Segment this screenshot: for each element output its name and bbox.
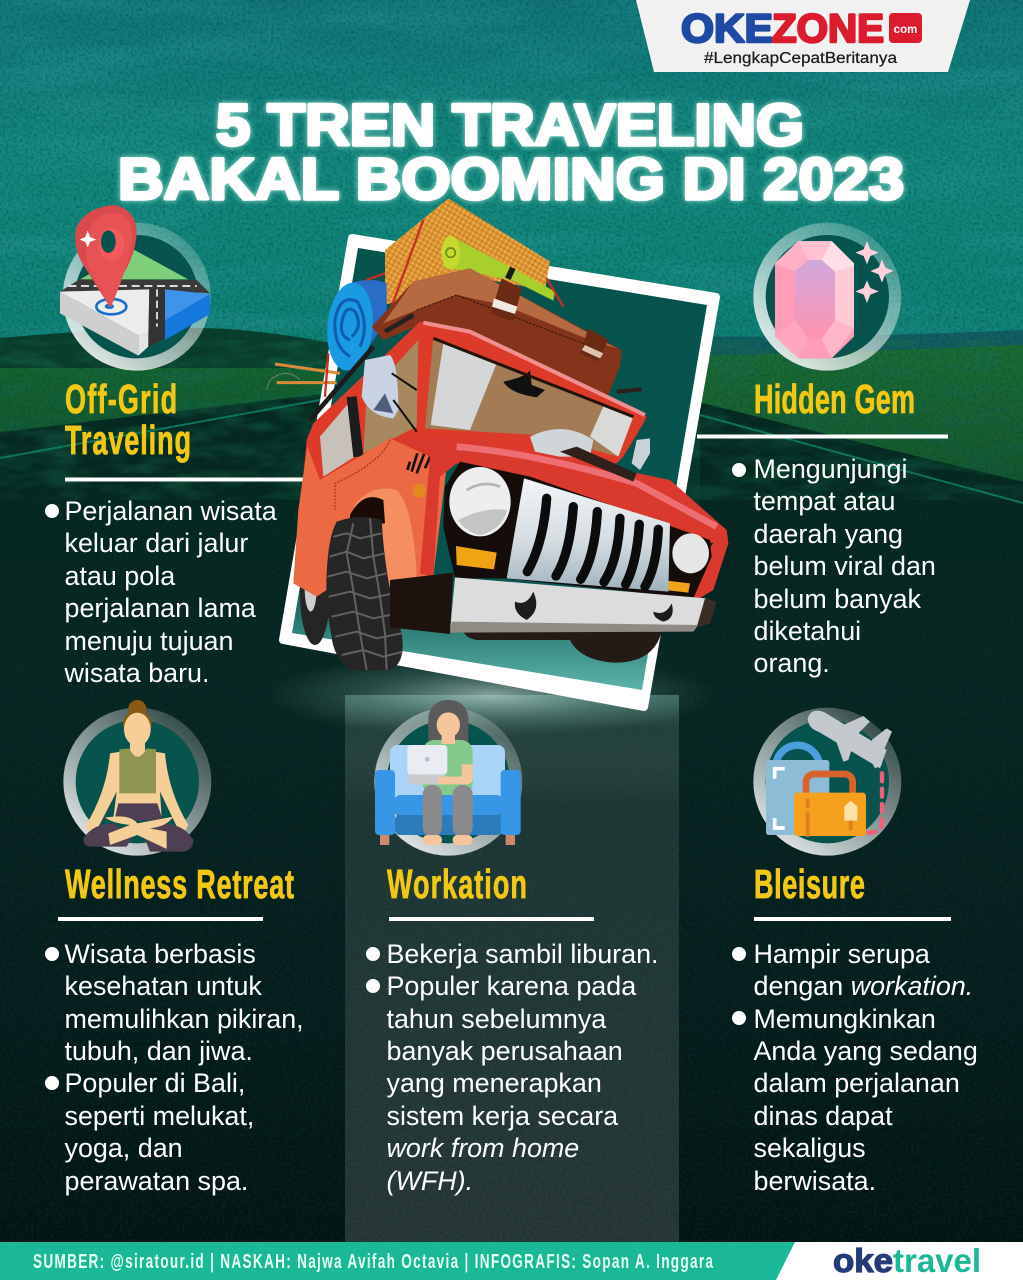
title [118, 93, 904, 212]
text block: Workation: Populer karena pada [386, 971, 636, 1001]
photo frame behind jeep [283, 238, 716, 707]
under carriage [463, 632, 662, 663]
hair [123, 700, 152, 738]
heading: Workation: Workation [387, 863, 527, 907]
red hood [390, 435, 728, 600]
sofa seat [375, 770, 521, 845]
text block: Wellness Retreat [45, 939, 304, 1196]
text block: Workation: banyak perusahaan [386, 1036, 623, 1066]
text block: Wellness Retreat: kesehatan untuk [64, 971, 262, 1001]
text block: Hidden Gem: tempat atau [754, 486, 896, 516]
text block: Bleisure: berwisata. [754, 1166, 876, 1196]
headlight left [449, 467, 511, 536]
text block: Off-Grid Traveling: menuju tujuan [64, 626, 233, 656]
text block: Off-Grid Traveling [45, 496, 277, 688]
text block: Wellness Retreat: perawatan spa. [64, 1166, 248, 1196]
green mat roll [441, 236, 555, 301]
red pin [75, 205, 137, 307]
rear wheel [300, 542, 330, 645]
text block: Wellness Retreat: Populer di Bali, [64, 1068, 245, 1098]
logo: okezone: OKE [681, 7, 773, 51]
text block: Wellness Retreat: memulihkan pikiran, [64, 1004, 304, 1034]
text block: Off-Grid Traveling: wisata baru. [64, 658, 209, 688]
text block: Bleisure: Anda yang sedang [754, 1036, 978, 1066]
cab roof and pillars [300, 322, 647, 510]
logo: okezone: #LengkapCepatBeritanya [704, 50, 897, 67]
illustration: red jeep with luggage [267, 198, 728, 671]
turn signals [456, 546, 690, 593]
laptop and arm [407, 745, 473, 784]
text block: Bleisure [732, 939, 978, 1196]
text block: Wellness Retreat: seperti melukat, [64, 1101, 254, 1131]
straps [325, 220, 563, 397]
orange suitcase [794, 774, 866, 836]
text block: Bleisure: sekaligus [754, 1133, 866, 1163]
heading: Off-Grid Traveling: Off-Grid [65, 378, 177, 422]
logo: okezone [636, 0, 970, 72]
text block: Workation: Bekerja sambil liburan. [386, 939, 659, 969]
text block: Workation: (WFH). [386, 1166, 473, 1196]
text block: Off-Grid Traveling: atau pola [64, 561, 175, 591]
text block: Off-Grid Traveling: perjalanan lama [64, 593, 256, 623]
person legs [423, 785, 473, 845]
heading: Off-Grid Traveling: Traveling [65, 419, 191, 463]
windshield [425, 338, 633, 457]
text block: Workation [366, 939, 659, 1196]
heading: Wellness Retreat: Wellness Retreat [65, 863, 294, 907]
dashed flight path [868, 773, 882, 833]
front tire [326, 517, 403, 671]
glow beneath the jeep [265, 653, 715, 737]
text block: Bleisure: dengan workation. [754, 971, 973, 1001]
text block: Bleisure: dalam perjalanan [754, 1068, 960, 1098]
text block: Off-Grid Traveling: keluar dari jalur [64, 528, 248, 558]
text block: Off-Grid Traveling: Perjalanan wisata [64, 496, 277, 526]
text block: Wellness Retreat: yoga, dan [64, 1133, 183, 1163]
body [83, 713, 193, 852]
blue bedroll [324, 280, 387, 372]
text block: Hidden Gem: diketahui [754, 616, 861, 646]
text block: Bleisure: Memungkinkan [754, 1004, 936, 1034]
hood vent [560, 447, 637, 482]
map base [60, 249, 210, 356]
airplane [808, 711, 892, 768]
icon: pink gem [753, 223, 901, 371]
text block: Hidden Gem [732, 454, 936, 678]
heading: Off-Grid Traveling [65, 378, 191, 463]
side windows [310, 340, 418, 477]
text block: Hidden Gem: orang. [754, 648, 830, 678]
bumper end cap [390, 573, 453, 634]
orange side body [293, 438, 457, 617]
bumper [450, 577, 717, 633]
footer bar [0, 1242, 1023, 1280]
text block: Bleisure: Hampir serupa [754, 939, 930, 969]
heading: Bleisure: Bleisure [754, 863, 865, 907]
divider lines [58, 434, 951, 921]
black grille surround [443, 462, 712, 598]
text block: Wellness Retreat: Wisata berbasis [64, 939, 256, 969]
blue bag [766, 745, 829, 835]
logo: okezone: ZONE [772, 7, 884, 51]
silver grille [507, 478, 670, 592]
text block: Hidden Gem: daerah yang [754, 519, 903, 549]
text block: Hidden Gem: belum viral dan [754, 551, 936, 581]
wicker basket [385, 198, 550, 305]
logo: oketravel: travel [893, 1242, 981, 1279]
brown suitcase [372, 268, 622, 398]
icon: yoga meditation [63, 700, 211, 856]
headlight right [672, 533, 709, 573]
text block: Workation: work from home [386, 1133, 579, 1163]
text block: Workation: sistem kerja secara [386, 1101, 618, 1131]
title: 5 TREN TRAVELING [216, 93, 804, 158]
logo: oketravel: oke [833, 1242, 893, 1279]
source credits: SUMBER: @siratour.id | NASKAH: Najwa Avifah Octavia | INFOGRAFIS: Sopan A. Inggara [33, 1250, 713, 1273]
icon: bags and airplane [753, 708, 901, 856]
rope and stick bundle [267, 364, 340, 390]
text block: Workation: tahun sebelumnya [386, 1004, 606, 1034]
right mirror [632, 438, 650, 470]
text block: Bleisure: dinas dapat [754, 1101, 893, 1131]
icon: location pin on map [60, 205, 211, 371]
text block: Hidden Gem: belum banyak [754, 584, 921, 614]
heading: Hidden Gem: Hidden Gem [754, 378, 915, 422]
panel: center column background [345, 695, 679, 1242]
text block: Hidden Gem: Mengunjungi [754, 454, 908, 484]
side mirror [362, 355, 417, 432]
title: BAKAL BOOMING DI 2023 [118, 147, 904, 212]
icon: workation on sofa [374, 700, 522, 856]
logo: okezone: com [894, 24, 917, 36]
logo: oketravel [833, 1242, 981, 1279]
text block: Workation: yang menerapkan [386, 1068, 602, 1098]
text block: Wellness Retreat: tubuh, dan jiwa. [64, 1036, 253, 1066]
